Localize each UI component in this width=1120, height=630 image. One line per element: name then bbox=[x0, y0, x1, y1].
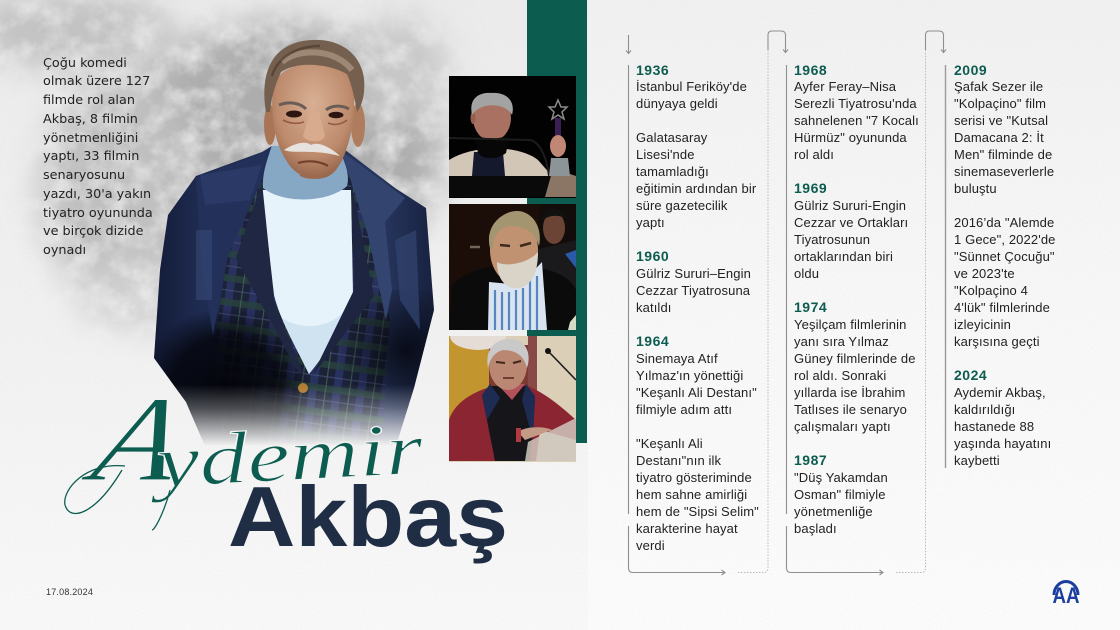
timeline column 3: Men" filminde de bbox=[954, 147, 1052, 162]
arrow: start of column 1 bbox=[626, 35, 631, 54]
timeline column 2: 1968 bbox=[794, 62, 827, 78]
title: Akbaş: Akbaş bbox=[228, 470, 508, 565]
timeline column 3: hastanede 88 bbox=[954, 419, 1034, 434]
title: Aydemir: A bbox=[73, 371, 200, 507]
timeline column 1: hem de "Sipsi Selim" bbox=[636, 504, 759, 519]
timeline column 1: filmiyle adım attı bbox=[636, 402, 732, 417]
timeline column 3: 2024 bbox=[954, 367, 987, 383]
timeline column 2: "Düş Yakamdan bbox=[794, 470, 888, 485]
intro text: tiyatro oyununda bbox=[43, 206, 153, 220]
timeline column 2: Ayfer Feray–Nisa bbox=[794, 79, 896, 94]
timeline column 2: 1969 bbox=[794, 180, 827, 196]
intro text: yazdı, 30'a yakın bbox=[43, 187, 151, 202]
timeline column 2: rol aldı bbox=[794, 147, 834, 162]
shirt bbox=[262, 190, 353, 374]
head bbox=[264, 40, 365, 179]
timeline column 1: Sinemaya Atıf bbox=[636, 351, 718, 366]
timeline column 1: karakterine hayat bbox=[636, 521, 738, 536]
timeline column 3: Aydemir Akbaş, bbox=[954, 385, 1046, 400]
timeline column 3: Damacana 2: İt bbox=[954, 130, 1044, 145]
main portrait bbox=[154, 40, 434, 444]
photo: award on stage bbox=[449, 76, 576, 198]
title: Aydemir Akbaş bbox=[64, 371, 508, 565]
intro text: Akbaş, 8 filmin bbox=[43, 112, 138, 127]
intro text bbox=[43, 56, 153, 258]
timeline column 3: "Kolpaçino" film bbox=[954, 96, 1046, 111]
timeline column 2: Güney filmlerinde de bbox=[794, 351, 916, 366]
timeline column 3: 2009 bbox=[954, 62, 987, 78]
timeline column 3: karşısına geçti bbox=[954, 334, 1040, 349]
timeline column 2: çalışmaları yaptı bbox=[794, 419, 891, 434]
timeline column 1: süre gazetecilik bbox=[636, 198, 728, 213]
coat lapels bbox=[196, 177, 262, 334]
timeline column 2: Tatlıses ile senaryo bbox=[794, 402, 907, 417]
green vertical band bbox=[527, 0, 587, 443]
timeline column 1: Cezzar Tiyatrosuna bbox=[636, 283, 750, 298]
connector: column 1 to 2 bbox=[768, 31, 788, 52]
timeline column 3: izleyicinin bbox=[954, 317, 1011, 332]
line: column 3 bbox=[944, 65, 946, 468]
timeline column 2: Serezli Tiyatrosu'nda bbox=[794, 96, 917, 111]
line: column 1 bbox=[628, 65, 725, 575]
timeline column 3: "Sünnet Çocuğu" bbox=[954, 249, 1055, 264]
timeline column 3: 1 Gece", 2022'de bbox=[954, 232, 1056, 247]
timeline column 1: verdi bbox=[636, 538, 665, 553]
timeline column 1: yaptı bbox=[636, 215, 665, 230]
timeline column 2: Cezzar ve Ortakları bbox=[794, 215, 908, 230]
timeline column 1: Lisesi'nde bbox=[636, 147, 695, 162]
timeline column 1: 1960 bbox=[636, 248, 669, 264]
timeline column 2: sahnelenen "7 Kocalı bbox=[794, 113, 919, 128]
timeline column 1: Gülriz Sururi–Engin bbox=[636, 266, 751, 281]
intro text: filmde rol alan bbox=[43, 93, 135, 108]
lower shadows bbox=[154, 310, 306, 440]
timeline column 1: Yılmaz'ın yönettiği bbox=[636, 368, 743, 383]
timeline column 3: 4'lük" filmlerinde bbox=[954, 300, 1050, 315]
timeline column 3: serisi ve "Kutsal bbox=[954, 113, 1048, 128]
photo: man with beard bbox=[449, 204, 576, 330]
timeline column 3: kaybetti bbox=[954, 453, 1000, 468]
timeline column 2: oldu bbox=[794, 266, 819, 281]
date: 17.08.2024 bbox=[46, 587, 93, 597]
intro text: oynadı bbox=[43, 243, 86, 258]
coat bbox=[150, 145, 440, 450]
timeline column 3 bbox=[954, 62, 1056, 468]
timeline column 2: Osman" filmiyle bbox=[794, 487, 886, 502]
timeline column 2: yönetmenliğe bbox=[794, 504, 873, 519]
timeline column 1: 1936 bbox=[636, 62, 669, 78]
timeline column 3: ve 2023'te bbox=[954, 266, 1015, 281]
timeline column 3: buluştu bbox=[954, 181, 997, 196]
timeline column 2: Gülriz Sururi-Engin bbox=[794, 198, 906, 213]
timeline column 2: rol aldı. Sonraki bbox=[794, 368, 886, 383]
timeline column 2: ortaklarından biri bbox=[794, 249, 893, 264]
timeline column 2: yanı sıra Yılmaz bbox=[794, 334, 889, 349]
timeline column 1: İstanbul Feriköy'de bbox=[636, 79, 747, 94]
timeline column 1: "Keşanlı Ali Destanı" bbox=[636, 385, 757, 400]
connector: column 2 to 3 bbox=[926, 31, 946, 52]
title: Aydemir: ydemir bbox=[146, 408, 426, 504]
intro text: yaptı, 33 filmin bbox=[43, 149, 139, 164]
timeline column 2: Yeşilçam filmlerinin bbox=[794, 317, 906, 332]
timeline column 1 bbox=[636, 62, 759, 553]
title: Aydemir bbox=[65, 371, 426, 530]
intro text: Çoğu komedi bbox=[43, 56, 127, 70]
intro text: ve birçok dizide bbox=[43, 224, 143, 239]
blazer bbox=[214, 175, 390, 446]
timeline column 1: Galatasaray bbox=[636, 130, 707, 145]
intro text: yönetmenliğini bbox=[43, 130, 138, 146]
timeline column 2: 1974 bbox=[794, 299, 827, 315]
timeline column 1: tiyatro gösteriminde bbox=[636, 470, 752, 485]
dotted return 1 bbox=[738, 50, 768, 572]
timeline column 3: kaldırıldığı bbox=[954, 402, 1015, 417]
timeline column 1: "Keşanlı Ali bbox=[636, 436, 703, 451]
turtleneck bbox=[263, 145, 348, 199]
timeline column 1: tamamladığı bbox=[636, 164, 709, 179]
timeline column 2: yıllarda ise İbrahim bbox=[794, 385, 906, 400]
intro text: senaryosunu bbox=[43, 168, 125, 183]
timeline column 1: 1964 bbox=[636, 333, 669, 349]
timeline column 1: eğitimin ardından bir bbox=[636, 181, 756, 196]
timeline column 3: Şafak Sezer ile bbox=[954, 79, 1043, 94]
photo: man in red jacket at podium bbox=[449, 336, 576, 462]
timeline column 1: dünyaya geldi bbox=[636, 96, 718, 111]
timeline column 2: başladı bbox=[794, 521, 837, 536]
intro text: olmak üzere 127 bbox=[43, 74, 150, 89]
timeline column 3: yaşında hayatını bbox=[954, 436, 1051, 451]
button bbox=[298, 383, 308, 393]
dotted return 2 bbox=[896, 50, 926, 572]
line: column 2 bbox=[786, 65, 883, 575]
timeline column 1: katıldı bbox=[636, 300, 672, 315]
timeline column 2: Tiyatrosunun bbox=[794, 232, 870, 247]
timeline column 2: 1987 bbox=[794, 452, 827, 468]
timeline column 1: hem sahne amirliği bbox=[636, 487, 747, 502]
timeline column 3: sinemaseverlerle bbox=[954, 164, 1054, 179]
timeline column 2 bbox=[794, 62, 919, 536]
timeline column 2: Hürmüz" oyununda bbox=[794, 130, 907, 145]
timeline column 3: "Kolpaçino 4 bbox=[954, 283, 1028, 298]
timeline column 3: 2016’da "Alemde bbox=[954, 215, 1054, 230]
timeline column 1: Destanı"nın ilk bbox=[636, 453, 721, 468]
